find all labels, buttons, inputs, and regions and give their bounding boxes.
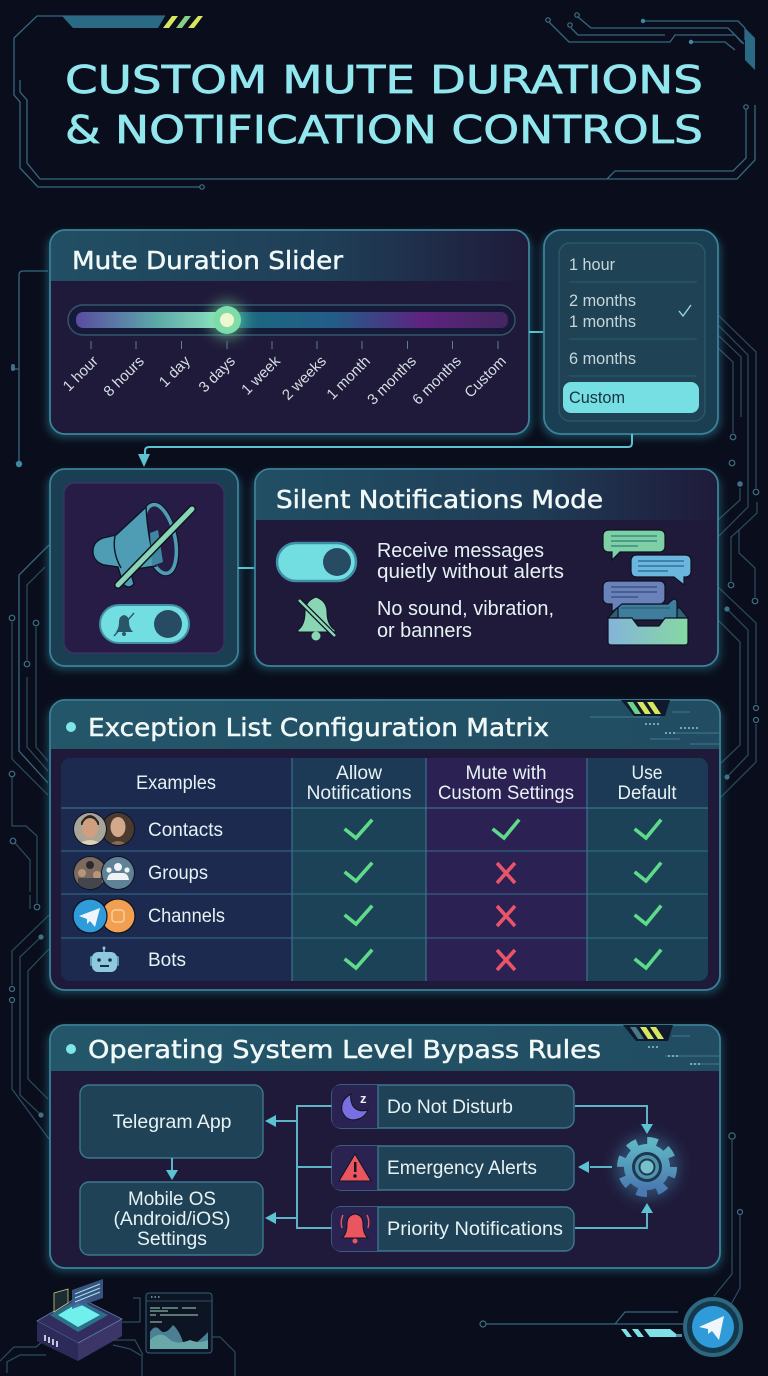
icon: crossed bell: [298, 597, 335, 640]
rule: do not disturb: z: [360, 1091, 367, 1106]
column headers: [136, 763, 677, 804]
slider labels: 8 hours: [100, 353, 148, 400]
text: no sound, vibration, or banners: or banners: [377, 620, 472, 642]
option: 6 months: 6 months: [569, 350, 636, 368]
matrix table: [61, 758, 708, 981]
box: mobile os settings: Settings: [137, 1229, 207, 1250]
title frame: [14, 13, 755, 189]
slider labels: 2 weeks: [279, 353, 330, 404]
heading: mute duration slider: Mute Duration Slider: [72, 246, 344, 275]
header accent stripes: [623, 1025, 720, 1064]
panel: exception list configuration matrix: [47, 700, 723, 994]
option: custom highlighted: Custom: [569, 389, 625, 407]
rule: emergency alerts: [332, 1146, 574, 1190]
title: [65, 58, 703, 153]
text: receive messages quietly: quietly without alerts: [377, 561, 564, 583]
heading: exception list: Exception List Configuration Matrix: [88, 713, 549, 742]
slider labels: 1 hour: [60, 353, 102, 395]
arrows: rules to app and os: [265, 1106, 332, 1228]
box: telegram app: [80, 1085, 263, 1158]
toggle: muted bell: [100, 605, 189, 643]
header accent stripes: [590, 700, 720, 744]
column headers: Notifications: [306, 783, 412, 804]
row: bots: Bots: [148, 950, 186, 971]
mute with custom settings marks: [494, 821, 518, 970]
text: receive messages quietly: [377, 540, 564, 583]
rule: do not disturb: Do Not Disturb: [387, 1097, 513, 1118]
illustration: isometric chip server: [0, 1279, 142, 1376]
icon: settings gear: [615, 1135, 679, 1199]
text: receive messages quietly: Receive messages: [377, 540, 544, 562]
option: 2 months, 1 months: 1 months: [569, 313, 636, 331]
heading: silent notifications mode: Silent Notifications Mode: [276, 485, 603, 514]
slider labels: Custom: [461, 353, 510, 401]
connector: megaphone to silent panel: [238, 567, 255, 569]
title: & NOTIFICATION CONTROLS: [65, 108, 703, 153]
option: custom highlighted: [563, 382, 699, 413]
column headers: Examples: [136, 773, 216, 794]
bullet: [66, 722, 76, 732]
rule: emergency alerts: Emergency Alerts: [387, 1158, 537, 1179]
connector: slider to dropdown: [529, 331, 544, 333]
text: no sound, vibration, or banners: No sound, vibration,: [377, 598, 554, 620]
box: mobile os settings: [80, 1182, 263, 1255]
rule: priority notifications: [332, 1207, 574, 1251]
column headers: Custom Settings: [438, 783, 574, 804]
option: 2 months, 1 months: 2 months: [569, 292, 636, 310]
column headers: Default: [618, 783, 677, 804]
arrow: dropdown to silent mode: [138, 434, 632, 467]
panel: megaphone: [47, 469, 241, 670]
icon: message bubbles and inbox tray: [603, 530, 691, 645]
row: channels: Channels: [148, 906, 225, 927]
row: bots: [90, 946, 186, 972]
slider labels: 3 months: [364, 353, 420, 408]
heading: bypass rules: Operating System Level Bypass Rules: [88, 1035, 601, 1064]
rule: do not disturb: [332, 1085, 574, 1128]
toggle: silent on: [277, 543, 356, 581]
box: mobile os settings: Mobile OS: [128, 1189, 216, 1210]
bullet: [66, 1044, 76, 1054]
option: 1 hour: 1 hour: [569, 256, 615, 274]
text: no sound, vibration, or banners: [377, 598, 554, 642]
slider labels: 1 month: [323, 353, 374, 403]
icon: selected check: [679, 305, 691, 316]
slider ticks: [91, 341, 498, 349]
row: contacts: [72, 810, 223, 846]
use default checks: [636, 821, 660, 968]
column headers: Mute with: [466, 763, 546, 784]
rule: priority notifications: Priority Notifications: [387, 1219, 563, 1240]
panel: duration dropdown: [541, 230, 721, 438]
panel: mute duration slider: [47, 230, 532, 438]
slider labels: 6 months: [409, 353, 465, 408]
slider track: [68, 305, 515, 335]
circuit traces background: [9, 271, 759, 1310]
column headers: Allow: [336, 763, 382, 784]
slider labels: [60, 352, 510, 408]
icon: muted megaphone: [93, 502, 192, 587]
panel: operating system level bypass rules: [47, 1025, 723, 1272]
box: mobile os settings: (Android/iOS): [114, 1209, 230, 1230]
illustration: area chart window: [113, 1293, 235, 1376]
row: contacts: Contacts: [148, 820, 223, 841]
row: groups: [72, 855, 208, 891]
row: channels: [73, 899, 225, 933]
box: telegram app: Telegram App: [112, 1112, 232, 1133]
title: CUSTOM MUTE DURATIONS: [65, 58, 703, 103]
telegram badge: [480, 1299, 741, 1355]
row: groups: Groups: [148, 863, 208, 884]
slider labels: 1 week: [238, 352, 284, 398]
arrows: rules to gear: [575, 1106, 653, 1228]
column headers: Use: [632, 763, 662, 784]
panel: silent notifications mode: [252, 469, 721, 670]
allow notifications checks: [346, 821, 371, 968]
option: 2 months, 1 months: [569, 292, 636, 331]
slider labels: 3 days: [196, 353, 239, 396]
slider labels: 1 day: [156, 352, 194, 391]
slider knob: [209, 302, 245, 338]
arrow: telegram app to mobile os: [166, 1158, 178, 1180]
